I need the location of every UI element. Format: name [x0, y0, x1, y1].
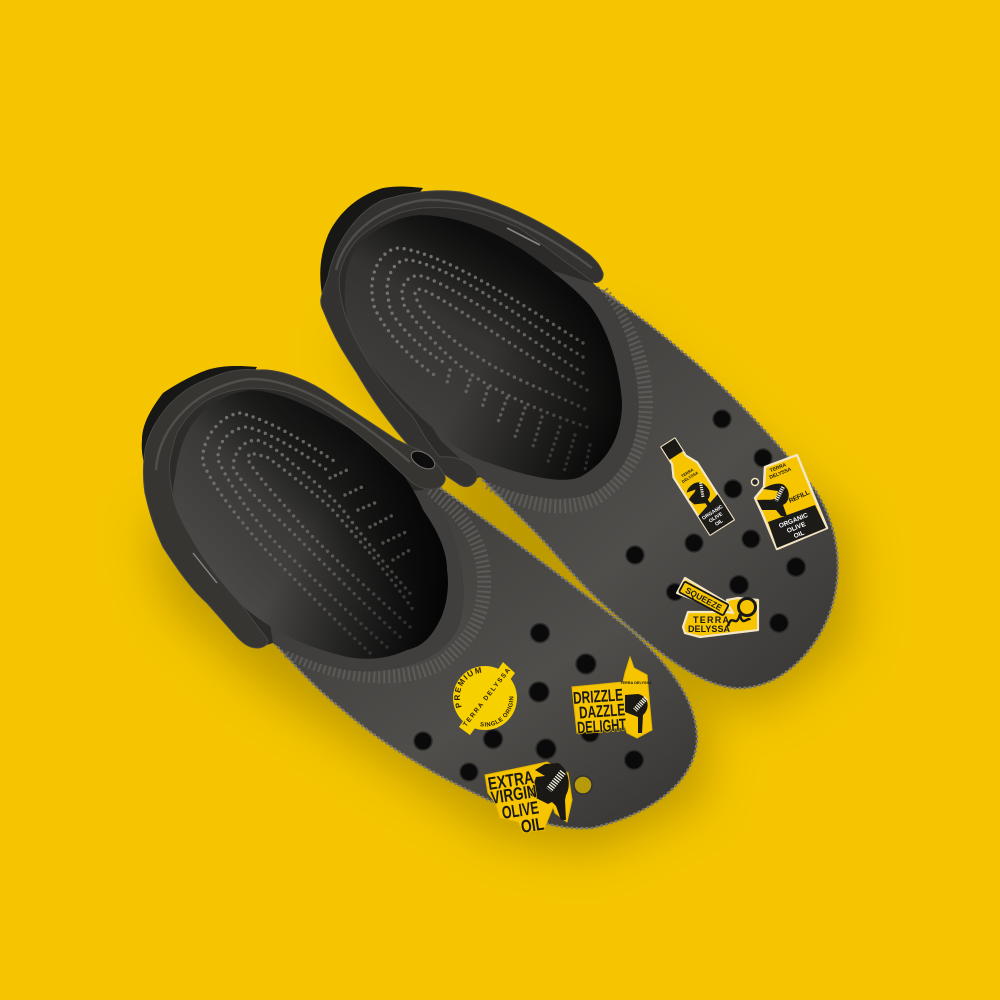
charm: squeeze terra delyssa: DELYSSA — [688, 624, 730, 634]
charm: extra virgin olive oil — [485, 762, 572, 837]
sole dots right — [372, 248, 590, 475]
charm: organic olive oil bottle: OLIVE — [708, 511, 724, 524]
collar right — [380, 230, 638, 498]
charm: organic olive oil bottle: ORGANIC — [701, 504, 725, 522]
charm: extra virgin olive oil: OIL — [519, 814, 545, 837]
strap gap glare right — [507, 228, 540, 245]
charm: drizzle dazzle delight — [572, 657, 652, 738]
heel bump right — [320, 186, 423, 320]
texture band right — [488, 292, 646, 506]
charm: refill pack: REFILL — [788, 489, 811, 505]
left clog — [142, 366, 697, 828]
rim underlay left — [144, 369, 463, 671]
heel bump left — [142, 366, 257, 480]
cast shadow — [150, 330, 850, 850]
yellow floor seen through hole — [574, 776, 592, 794]
strap highlight left — [156, 379, 410, 470]
charm: organic olive oil bottle: TERRA — [680, 467, 694, 479]
charm: refill pack: OLIVE — [786, 521, 807, 535]
collar left — [250, 490, 463, 671]
charm: organic olive oil bottle — [656, 435, 734, 535]
texture band left — [285, 490, 484, 676]
charm: extra virgin olive oil: EXTRA — [486, 767, 535, 794]
charm: squeeze terra delyssa — [677, 578, 758, 637]
charm: premium single origin: SINGLE ORIGIN — [480, 696, 514, 727]
footbed left — [173, 390, 448, 659]
charm: premium single origin — [453, 662, 517, 735]
strap gap glare left — [193, 553, 217, 583]
charm: premium single origin: TERRA DELYSSA — [462, 667, 512, 728]
charm: premium single origin: PREMIUM — [454, 667, 482, 708]
clog body right — [483, 287, 838, 688]
rim underlay right — [321, 191, 638, 498]
footbed right — [345, 215, 622, 480]
charm: refill pack — [752, 455, 827, 549]
charm: drizzle dazzle delight: DELIGHT — [577, 715, 627, 738]
charm: extra virgin olive oil: OLIVE — [500, 797, 540, 823]
charm: refill pack: TERRA — [769, 462, 788, 474]
charm: squeeze terra delyssa: SQUEEZE — [684, 585, 724, 613]
charm: drizzle dazzle delight: TERRA DELYSSA — [620, 681, 652, 685]
charm: refill pack: DELYSSA — [769, 466, 793, 481]
charm: refill pack: ORGANIC — [778, 512, 809, 530]
right clog — [320, 186, 838, 688]
heel strap right — [321, 191, 603, 487]
vent holes left — [414, 624, 644, 781]
sole dots left — [203, 413, 413, 653]
charm: organic olive oil bottle: DELYSSA — [681, 470, 699, 484]
charm: drizzle dazzle delight: DAZZLE — [578, 700, 626, 722]
strap highlight right — [336, 200, 592, 270]
charm: refill pack: OIL — [793, 530, 806, 540]
strap rivet — [408, 447, 438, 473]
clog body left — [273, 482, 697, 828]
charm: organic olive oil bottle: OIL — [714, 518, 724, 528]
vent holes right — [626, 410, 806, 632]
charm: squeeze terra delyssa: TERRA — [693, 615, 730, 625]
charm: drizzle dazzle delight: DRIZZLE — [572, 685, 624, 708]
charm: extra virgin olive oil: VIRGIN — [489, 781, 538, 808]
heel strap left — [144, 369, 445, 648]
